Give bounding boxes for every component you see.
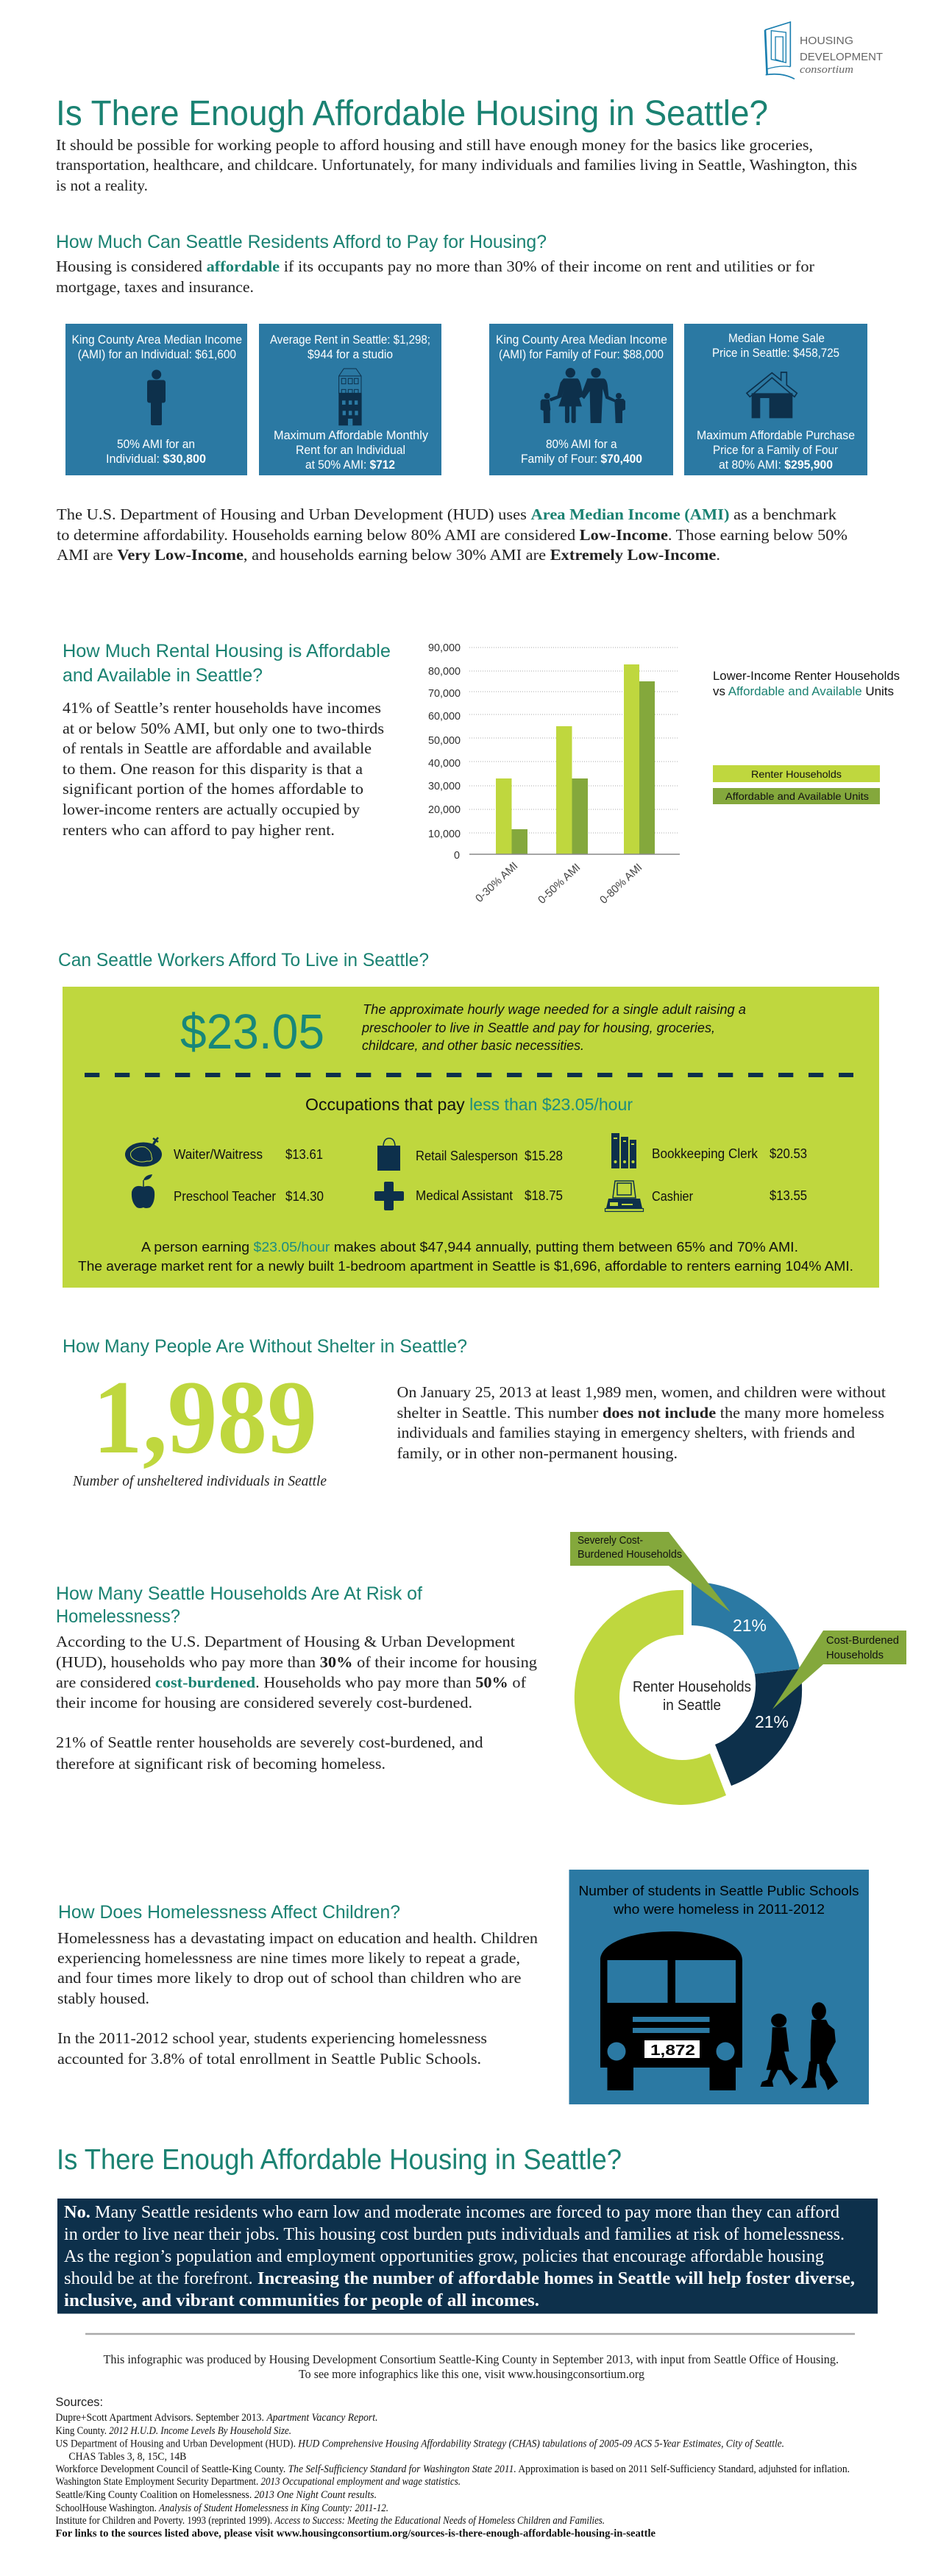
panel: conclusion: should be at the forefront. Increasing the number of affordable homes in Seattle will help foster diverse, [64, 2269, 855, 2288]
wage description: childcare, and other basic necessities. [362, 1038, 584, 1053]
sources list: Dupre+Scott Apartment Advisors. September 2013. Apartment Vacancy Report. [56, 2412, 378, 2424]
sources list: For links to the sources listed above, please visit www.housingconsortium.org/sources-is-there-enough-affordable-housing-in-seattle [56, 2528, 655, 2540]
panel: average rent: Rent for an Individual [296, 443, 405, 457]
icon: family [541, 368, 625, 423]
bar chart: 0-30% AMI [473, 859, 520, 905]
donut chart: 21% [733, 1616, 767, 1635]
sources heading: Sources: [56, 2395, 103, 2409]
panel: home sale price: Median Home Sale [728, 331, 825, 345]
logo: Housing Development Consortium: HOUSING [800, 35, 853, 47]
heading: at risk: Homelessness? [56, 1606, 180, 1627]
sources list: Seattle/King County Coalition on Homelessness. 2013 One Night Count results. [56, 2489, 377, 2501]
occupation: waiter [125, 1138, 323, 1167]
text: shelter [397, 1383, 886, 1462]
wage figure: $23.05 [180, 1004, 324, 1060]
intro text: is not a reality. [56, 177, 148, 194]
heading: at risk [56, 1583, 422, 1627]
donut chart: 21% [755, 1712, 789, 1731]
text: at risk: According to the U.S. Department of Housing & Urban Development [56, 1633, 515, 1650]
callout: cost-burdened: Cost-Burdened [826, 1634, 899, 1647]
panel: home sale price: Price in Seattle: $458,725 [712, 346, 839, 360]
bar chart: 40,000 [428, 757, 461, 770]
text: shelter: individuals and families staying in emergency shelters, with friends and [397, 1424, 856, 1441]
panel: family income: 80% AMI for a [546, 437, 617, 451]
text: children: and four times more likely to drop out of school than children who are [57, 1969, 521, 1987]
wage explanation: The average market rent for a newly built 1-bedroom apartment in Seattle is $1,696, affordable to renters earning 104% AMI. [78, 1259, 853, 1274]
text: children: experiencing homelessness are nine times more likely to repeat a grade, [57, 1949, 520, 1967]
sources list: Washington State Employment Security Department. 2013 Occupational employment and wage statistics. [56, 2476, 461, 2488]
text: shelter: family, or in other non-permanent housing. [397, 1444, 678, 1462]
sources list: Institute for Children and Poverty. 1993 (reprinted 1999). Access to Success: Meeting the Educational Needs of Homeless Children and Families. [56, 2515, 605, 2527]
heading: at risk: How Many Seattle Households Are At Risk of [56, 1583, 422, 1604]
wage description [361, 1002, 746, 1053]
occupation: cashier [605, 1181, 807, 1211]
chart title [713, 669, 900, 698]
wage explanation: A person earning $23.05/hour makes about $47,944 annually, putting them between 65% and 70% AMI. [141, 1240, 798, 1255]
text: children: In the 2011-2012 school year, students experiencing homelessness [57, 2029, 487, 2047]
bar chart: 10,000 [428, 828, 461, 840]
panel: average rent [259, 324, 441, 475]
text: rental housing: renters who can afford to pay higher rent. [63, 821, 335, 839]
bar chart: 60,000 [428, 710, 461, 723]
chart legend: Affordable and Available Units [725, 790, 869, 802]
panel: average rent: Maximum Affordable Monthly [274, 428, 428, 442]
callout: severely cost-burdened: Burdened Households [578, 1548, 682, 1561]
text: children: stably housed. [57, 1990, 149, 2007]
text: HUD definitions [57, 505, 848, 564]
bar chart: 50,000 [428, 734, 461, 747]
caption: number of unsheltered: Number of unsheltered individuals in Seattle [72, 1473, 327, 1489]
conclusion title: Is There Enough Affordable Housing in Seattle? [57, 2144, 622, 2176]
text: at risk: are considered cost-burdened . Households who pay more than 50% of [56, 1673, 526, 1691]
big number: 1,989: 1,989 [93, 1359, 317, 1475]
callout: cost-burdened: Households [826, 1649, 884, 1661]
logo: Housing Development Consortium [765, 22, 883, 79]
callout: severely cost-burdened [570, 1532, 731, 1612]
occupation: waiter: $13.61 [285, 1147, 323, 1162]
occupation: retail: Retail Salesperson [416, 1149, 518, 1163]
text: HUD definitions: to determine affordability. Households earning below 80% AMI are considered Low-Income . Those earning below 50% [57, 526, 848, 544]
bar chart: 0-80% AMI [597, 861, 644, 906]
title: Is There Enough Affordable Housing in Seattle? [56, 94, 768, 133]
sources list: King County. 2012 H.U.D. Income Levels By Household Size. [56, 2425, 291, 2437]
panel: individual income: 50% AMI for an [117, 437, 195, 451]
sources list: CHAS Tables 3, 8, 15C, 14B [68, 2451, 186, 2463]
wage description: The approximate hourly wage needed for a single adult raising a [363, 1002, 746, 1017]
text: rental housing: of rentals in Seattle are affordable and available [63, 739, 372, 757]
panel: average rent: $944 for a studio [308, 347, 393, 361]
sources list: Workforce Development Council of Seattle-King County. The Self-Sufficiency Standard for Washington State 2011. Approximation is based on 2011 Self-Sufficiency Standard, adjuhsted for inflation. [56, 2463, 850, 2475]
bar chart: 70,000 [428, 687, 461, 700]
heading: how much can residents afford: How Much Can Seattle Residents Afford to Pay for Housing? [56, 232, 547, 252]
text: at risk [56, 1633, 538, 1773]
bar chart [428, 642, 680, 906]
panel: conclusion: No. Many Seattle residents who earn low and moderate incomes are forced to pay more than they can afford [64, 2203, 839, 2222]
panel: individual income: (AMI) for an Individual: $61,600 [78, 347, 236, 361]
panel heading [578, 1884, 859, 1917]
text: affordable definition: Housing is considered affordable if its occupants pay no more than 30% of their income on rent and utilities or for [56, 258, 814, 275]
chart legend [713, 765, 880, 804]
occupation: medical assistant: Medical Assistant [416, 1188, 513, 1203]
bar chart: 30,000 [428, 780, 461, 792]
chart title: Lower-Income Renter Households [713, 669, 900, 683]
heading: rental housing: How Much Rental Housing is Affordable [63, 641, 391, 661]
sources list: SchoolHouse Washington. Analysis of Student Homelessness in King County: 2011-12. [56, 2502, 388, 2514]
text: rental housing: lower-income renters are actually occupied by [63, 801, 360, 818]
panel: average rent: Average Rent in Seattle: $1,298; [270, 333, 430, 347]
panel: individual income: King County Area Median Income [72, 333, 242, 347]
text: HUD definitions: AMI are Very Low-Income , and households earning below 30% AMI are Extremely Low-Income . [57, 546, 720, 564]
panel: home sale price [684, 324, 867, 475]
panel: individual income [65, 324, 247, 475]
panel: family income [489, 324, 673, 475]
text: children: accounted for 3.8% of total enrollment in Seattle Public Schools. [57, 2050, 481, 2068]
text: affordable definition: mortgage, taxes and insurance. [56, 278, 254, 296]
occupations heading: Occupations that pay less than $23.05/hour [305, 1095, 633, 1114]
bar chart: 0-50% AMI [536, 861, 583, 906]
text: rental housing: 41% of Seattle’s renter households have incomes [63, 699, 381, 717]
text: children [57, 1929, 539, 2068]
text: rental housing [63, 699, 384, 839]
bar chart: 80,000 [428, 665, 461, 678]
occupation: preschool teacher: $14.30 [285, 1189, 324, 1204]
panel: home sale price: at 80% AMI: $295,900 [719, 458, 833, 472]
panel: conclusion: As the region’s population and employment opportunities grow, policies that encourage affordable housing [64, 2247, 824, 2266]
bar chart: 90,000 [428, 642, 461, 654]
callout: cost-burdened [772, 1631, 906, 1709]
occupation: preschool teacher [132, 1174, 324, 1208]
panel: conclusion: inclusive, and vibrant communities for people of all incomes. [64, 2291, 539, 2310]
credit text: This infographic was produced by Housing Development Consortium Seattle-King County in September 2013, with input from Seattle Office of Housing. [103, 2352, 839, 2366]
panel: home sale price: Maximum Affordable Purchase [697, 428, 855, 442]
occupation: waiter: Waiter/Waitress [174, 1147, 263, 1162]
panel: individual income: Individual: $30,800 [106, 452, 206, 466]
panel: conclusion [57, 2199, 878, 2313]
callout: severely cost-burdened: Severely Cost- [578, 1534, 643, 1547]
chart title: vs Affordable and Available Units [713, 684, 894, 698]
text: rental housing: at or below 50% AMI, but only one to two-thirds [63, 720, 384, 737]
panel: average rent: at 50% AMI: $712 [305, 458, 395, 472]
credit text: To see more infographics like this one, visit www.housingconsortium.org [299, 2367, 644, 2381]
text: at risk: therefore at significant risk of becoming homeless. [56, 1755, 385, 1773]
panel heading: who were homeless in 2011-2012 [613, 1902, 825, 1917]
occupation: retail [377, 1138, 563, 1171]
text: shelter: On January 25, 2013 at least 1,989 men, women, and children were without [397, 1383, 886, 1401]
bar chart: 20,000 [428, 803, 461, 816]
icon: bus: 1,872 [650, 2043, 695, 2059]
panel: family income: Family of Four: $70,400 [521, 452, 642, 466]
panel: family income: King County Area Median Income [496, 333, 667, 347]
panel: family income: (AMI) for Family of Four: $88,000 [499, 347, 664, 361]
occupation: bookkeeping: Bookkeeping Clerk [652, 1146, 758, 1161]
text: at risk: 21% of Seattle renter households are severely cost-burdened, and [56, 1734, 483, 1751]
occupation: medical assistant: $18.75 [525, 1188, 563, 1203]
occupation: preschool teacher: Preschool Teacher [174, 1189, 276, 1204]
text: affordable definition [56, 258, 814, 296]
panel: conclusion: in order to live near their jobs. This housing cost burden puts individuals and families at risk of homelessness. [64, 2225, 845, 2244]
intro text: transportation, healthcare, and childcare. Unfortunately, for many individuals and families living in Seattle, Washington, this [56, 156, 857, 174]
occupation: medical assistant [374, 1182, 563, 1210]
text: rental housing: significant portion of the homes affordable to [63, 780, 363, 798]
text: shelter: shelter in Seattle. This number does not include the many more homeless [397, 1404, 884, 1422]
intro text: It should be possible for working people to afford housing and still have enough money for the basics like groceries, [56, 136, 813, 154]
intro text [56, 136, 857, 194]
text: rental housing: to them. One reason for this disparity is that a [63, 760, 363, 778]
panel: hourly wage [63, 987, 879, 1288]
heading: shelter: How Many People Are Without Shelter in Seattle? [63, 1336, 467, 1357]
donut chart: Renter Households [633, 1679, 751, 1695]
text: HUD definitions: The U.S. Department of Housing and Urban Development (HUD) uses Area Median Income (AMI) as a benchmark [57, 505, 837, 523]
icon: children walking [761, 2002, 838, 2090]
text: at risk: their income for housing are considered severely cost-burdened. [56, 1694, 472, 1711]
occupation: cashier: $13.55 [770, 1188, 807, 1203]
sources list: US Department of Housing and Urban Development (HUD). HUD Comprehensive Housing Affordability Strategy (CHAS) tabulations of 2005-09 ACS 5-Year Estimates, City of Seattle. [56, 2438, 784, 2450]
heading: workers: Can Seattle Workers Afford To Live in Seattle? [58, 950, 429, 971]
logo: Housing Development Consortium: DEVELOPMENT [800, 51, 883, 63]
bar chart: 0 [454, 849, 460, 862]
credit text [103, 2352, 839, 2381]
donut chart [575, 1582, 802, 1805]
panel: school bus [569, 1870, 869, 2104]
donut chart: in Seattle [663, 1697, 721, 1714]
logo: Housing Development Consortium: consortium [800, 64, 853, 76]
occupation: cashier: Cashier [652, 1189, 693, 1204]
text: at risk: (HUD), households who pay more than 30% of their income for housing [56, 1653, 538, 1671]
heading: children: How Does Homelessness Affect Children? [58, 1902, 400, 1923]
occupation: bookkeeping [611, 1133, 807, 1168]
icon: apartment building [338, 369, 362, 425]
wage description: preschooler to live in Seattle and pay for housing, groceries, [361, 1021, 715, 1035]
text: children: Homelessness has a devastating impact on education and health. Children [57, 1929, 539, 1947]
chart legend: Renter Households [751, 768, 842, 780]
panel: home sale price: Price for a Family of Four [713, 443, 838, 457]
occupation: retail: $15.28 [525, 1149, 563, 1163]
icon: house [747, 372, 797, 418]
wage explanation [78, 1240, 853, 1274]
sources list [56, 2412, 850, 2540]
icon: bus [600, 1931, 742, 2090]
icon: person [147, 369, 166, 425]
occupation: bookkeeping: $20.53 [770, 1146, 807, 1161]
heading: rental housing [63, 641, 391, 686]
panel heading: Number of students in Seattle Public Schools [578, 1884, 859, 1898]
heading: rental housing: and Available in Seattle? [63, 665, 263, 686]
